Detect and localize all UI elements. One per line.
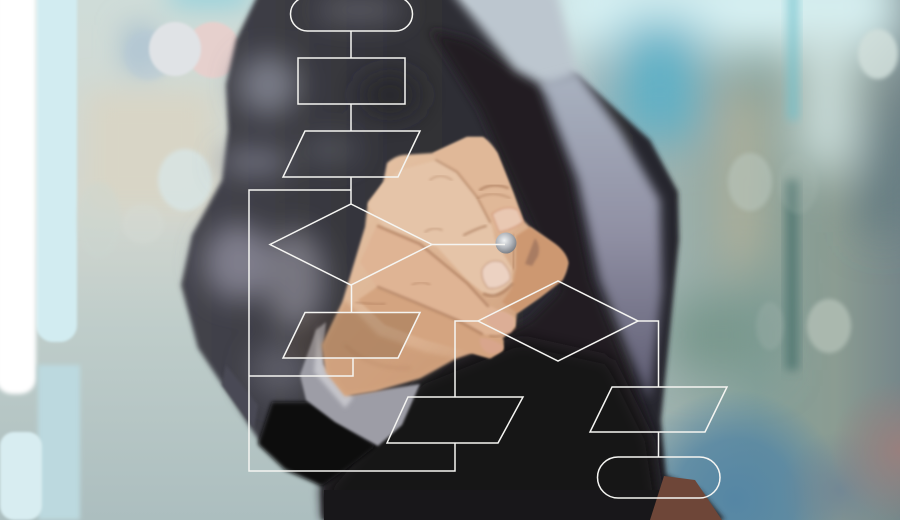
flowchart: connector xyxy=(658,432,660,457)
flowchart: top terminator xyxy=(290,0,412,31)
hand: palm and back of hand xyxy=(322,137,568,396)
background: lower reflections xyxy=(38,365,80,520)
background: lower-right colour glows xyxy=(625,390,845,520)
jacket: black lower torso xyxy=(325,340,662,520)
hand: knuckle creases and finger gaps xyxy=(345,160,515,368)
jacket: solid bottom edge of torso xyxy=(324,490,660,520)
flowchart: lower parallelogram xyxy=(387,397,523,443)
background: left-side soft panels xyxy=(85,0,250,210)
bokeh lights xyxy=(77,22,898,353)
hand: middle fingernail xyxy=(482,261,510,288)
background: right-side vertical teal stripe xyxy=(786,0,798,370)
shirt cuff xyxy=(300,322,420,446)
hand: pinky finger xyxy=(358,287,503,358)
hand: thumbnail xyxy=(525,238,539,266)
jacket: sleeve buttons xyxy=(222,365,258,428)
jacket: pale shirt strip xyxy=(450,0,578,90)
flowchart: connector to decision xyxy=(350,177,352,204)
flowchart: return line xyxy=(249,358,353,376)
flowchart: bottom terminator xyxy=(598,457,720,498)
hand: index fingernail xyxy=(492,208,523,232)
flowchart: second parallelogram xyxy=(283,312,420,358)
flowchart: connector xyxy=(350,104,352,131)
jacket: torso and sleeve silhouette xyxy=(181,0,725,520)
jacket: dark lapel and torso shadow xyxy=(322,30,662,520)
lower body hand at the hip xyxy=(650,476,722,520)
hand: wrist and palm shade xyxy=(322,300,455,396)
background: white light streak xyxy=(0,0,36,394)
background: right-side colour blocks xyxy=(550,0,900,370)
jacket: shoulder and sleeve sheen xyxy=(204,0,420,398)
flowchart: second decision diamond xyxy=(478,281,638,361)
flowchart: connector to lower parallelogram xyxy=(455,321,478,397)
flowchart xyxy=(249,0,727,498)
jacket: black sleeve end xyxy=(258,402,376,486)
flowchart: outer loop line xyxy=(249,190,455,471)
hand holding the pen xyxy=(322,137,568,396)
flowchart: right parallelogram xyxy=(590,387,727,432)
hand: index finger xyxy=(432,138,523,234)
businessman's jacket xyxy=(181,0,725,520)
background: pale blue light streak xyxy=(36,0,77,342)
flowchart: branch connector xyxy=(638,321,658,387)
hand: ring fingernail xyxy=(487,311,514,333)
flowchart: process box xyxy=(298,58,405,104)
flowchart: input parallelogram xyxy=(283,131,420,177)
flowchart: connector xyxy=(350,285,352,312)
hand: pinky fingernail xyxy=(480,338,503,354)
pen tip: silver ball xyxy=(496,232,516,254)
flowchart: line to pen tip xyxy=(432,244,505,246)
hand: middle finger xyxy=(368,160,512,296)
jacket: grey tie and lapel band xyxy=(540,72,662,400)
hand: thumb xyxy=(502,227,568,313)
flowchart: decision diamond xyxy=(270,204,432,285)
hand: ring finger xyxy=(360,225,515,337)
flowchart: connector xyxy=(350,31,352,58)
